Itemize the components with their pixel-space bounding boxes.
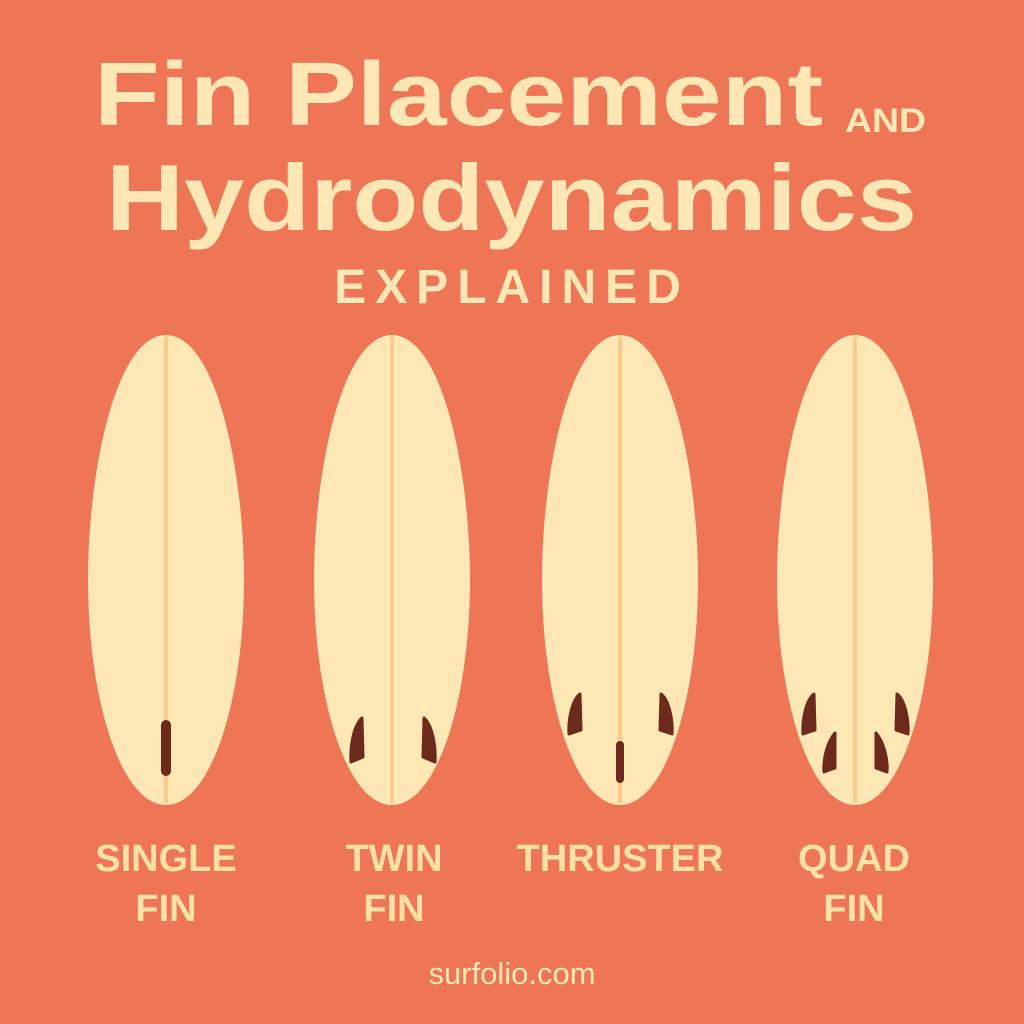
label: thruster: THRUSTER: [517, 838, 723, 880]
board: quad fin: [777, 335, 933, 805]
label: quad fin: [798, 838, 910, 930]
label: twin fin: TWIN: [345, 838, 443, 880]
title: [94, 45, 926, 314]
title line 2: Hydrodynamics: [106, 145, 917, 250]
label: quad fin: FIN: [823, 888, 885, 930]
footer: surfolio.com: [428, 956, 596, 991]
title line 1: Fin Placement: [94, 45, 823, 145]
label: single fin: SINGLE: [95, 838, 237, 880]
label: single fin: FIN: [135, 888, 197, 930]
label: quad fin: QUAD: [798, 838, 910, 880]
label: twin fin: [345, 838, 443, 930]
board: single fin: [88, 335, 244, 805]
label: twin fin: FIN: [363, 888, 425, 930]
label: single fin: [95, 838, 237, 930]
board: thruster: [542, 335, 698, 805]
subtitle: EXPLAINED: [334, 261, 690, 314]
board: twin fin: [314, 335, 470, 805]
title AND: AND: [845, 102, 926, 140]
